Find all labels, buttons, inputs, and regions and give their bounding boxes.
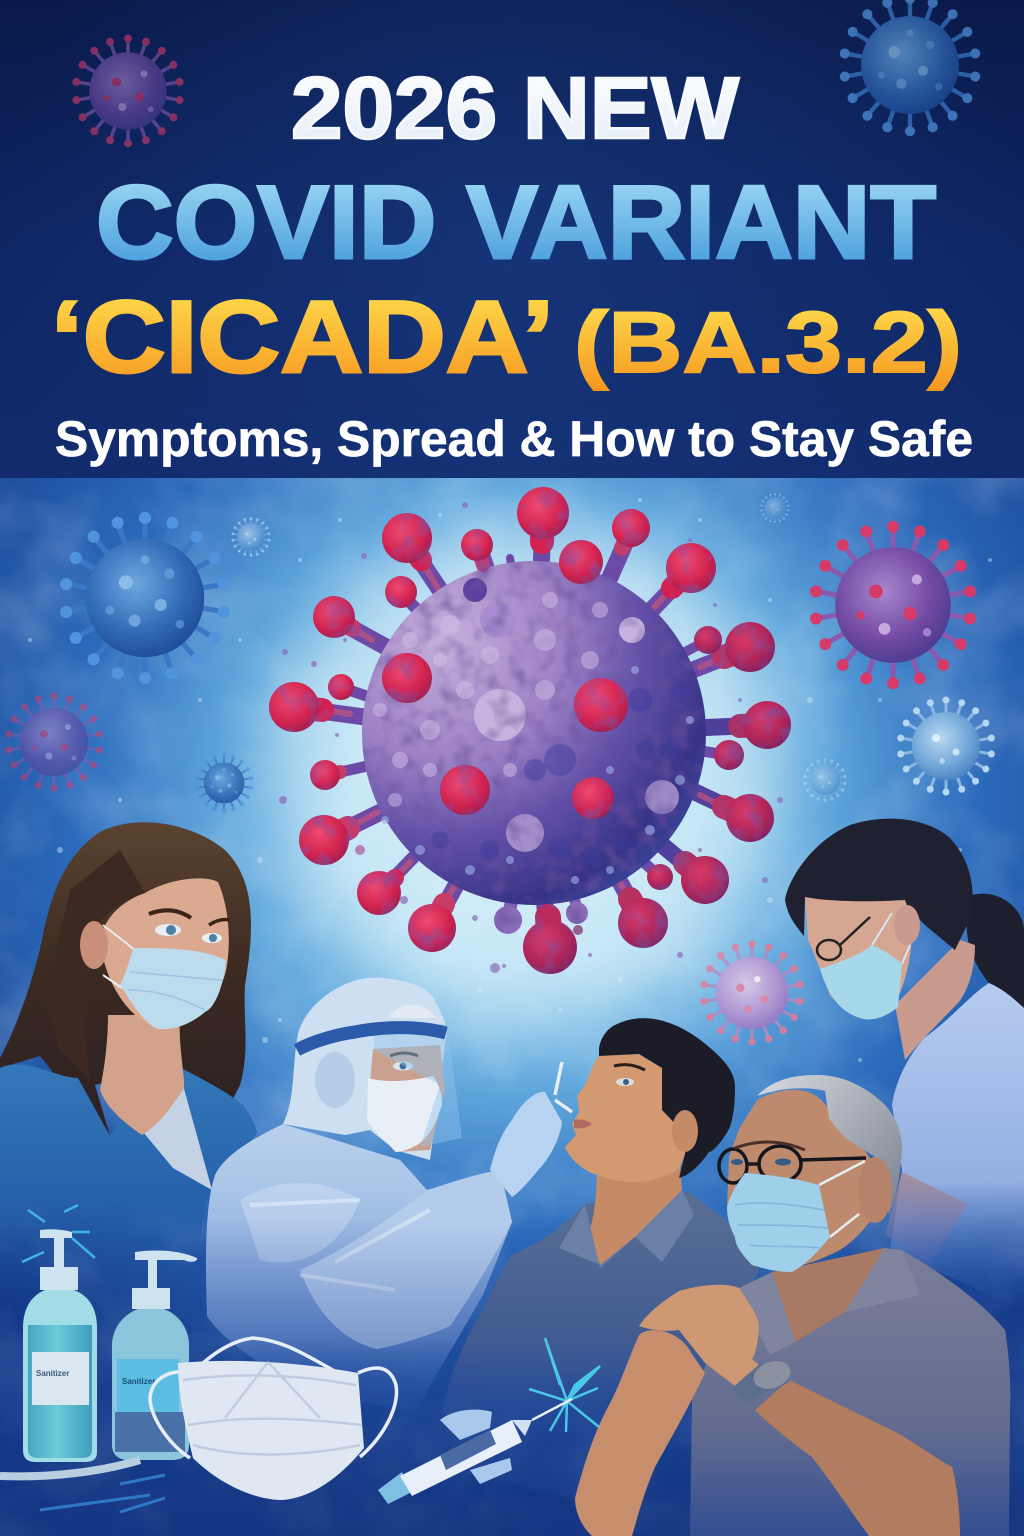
arm [300,1170,512,1349]
glove [490,1092,562,1197]
face [100,878,229,1030]
woman with mask [0,822,257,1310]
virus surface texture light [373,592,608,807]
icon: left bottle sparkle [22,1205,95,1262]
icon: sanitizer bottle right [112,1250,197,1460]
face [805,897,912,1014]
uniform [890,983,1024,1310]
face [565,1054,690,1182]
hair [785,819,973,950]
subtitle: Symptoms, Spread & How to Stay Safe [55,411,973,467]
watch [732,1356,794,1405]
virus spikes [298,520,762,942]
debris flecks [279,502,783,973]
icon: sanitizer bottle left: Sanitizer [36,1369,69,1378]
neck [589,1165,682,1265]
shirt [443,1192,759,1500]
spike pink streaks [325,563,722,915]
face mask [367,1076,442,1152]
hood [283,978,447,1160]
virus sphere [362,561,706,905]
visor [374,1023,462,1147]
collar [735,1248,920,1355]
eye and brow [390,1053,418,1070]
head [727,1090,877,1268]
floor streaks [40,1475,165,1512]
icon: sparkle [529,1338,600,1432]
icon: virus top right [839,0,981,136]
inner shirt [143,1085,212,1190]
icon: syringe [378,1410,532,1504]
icon: small blue virus [194,753,254,813]
icon: blue virus large left [59,512,231,684]
icon: surgical mask [150,1338,397,1500]
ear [80,921,108,969]
title line: COVID VARIANT: COVID VARIANT [96,165,936,281]
eyes [731,1158,791,1166]
virus surface texture highlights [381,666,694,884]
icon: virus top left [72,35,184,147]
health worker in PPE [206,978,572,1412]
floating viruses [5,493,995,1045]
face mask [727,1161,865,1272]
face mask [820,913,910,1020]
gray hair [757,1075,902,1215]
virus surface texture dark [431,681,689,883]
glasses [817,917,870,960]
arm [885,1172,968,1265]
eyes and brows [149,910,229,943]
hood fold [315,1052,355,1108]
icon: sanitizer bottle left [23,1229,97,1462]
virus glow [280,520,780,1020]
icon: faint particle virus [760,493,790,523]
swab [555,1062,572,1112]
background particles [28,498,992,1133]
ponytail [967,894,1024,1018]
suit shadow [240,1183,360,1262]
eye and brow [614,1065,645,1086]
ear [858,1157,892,1223]
neck [895,940,975,1060]
chest and neck [100,1015,184,1135]
icon: lavender virus low [700,941,804,1045]
icon: faint virus [803,758,847,802]
icon: pink virus right [809,521,977,689]
hair front lock [45,850,145,1080]
glasses [719,1146,866,1183]
icon: sanitizer bottle right: Sanitizer [122,1377,155,1386]
title line: BA.3.2: (BA.3.2) [574,295,962,391]
hair [599,1018,735,1178]
visor band [297,1028,446,1050]
face mask [103,925,226,1029]
title line: 2026 NEW: 2026 NEW [291,60,740,157]
icon: dim pink virus left [5,692,103,792]
brow [735,1142,805,1150]
header panel [0,0,1024,478]
collar [559,1190,694,1268]
icon: tube [0,1460,140,1476]
suit body [206,1124,512,1412]
hands [639,1285,765,1395]
young man swabbed [443,1018,759,1500]
cap [388,1004,436,1018]
ear [672,1110,698,1152]
bottom fade [0,1220,1024,1536]
forearm right [755,1380,960,1536]
shirt [690,1250,1010,1536]
main virus [269,487,791,1020]
virus heads bright [269,487,716,952]
ear [894,905,920,945]
face [367,1045,445,1152]
virus heads maroon [523,622,791,974]
lips [574,1120,592,1128]
nurse on right [785,819,1024,1310]
scrubs [0,1060,257,1310]
scene background [0,478,1024,1536]
older man with mask [575,1075,1010,1536]
neck [772,1248,885,1342]
arm highlights [250,1200,430,1290]
protective supplies [0,1205,600,1512]
forearm left [575,1330,705,1536]
icon: small virus [231,517,271,557]
hair back [0,822,251,1136]
title line: CICADA: ‘CICADA’ [51,280,554,394]
icon: pale virus right [897,696,995,796]
pale surface knobs [463,578,679,934]
